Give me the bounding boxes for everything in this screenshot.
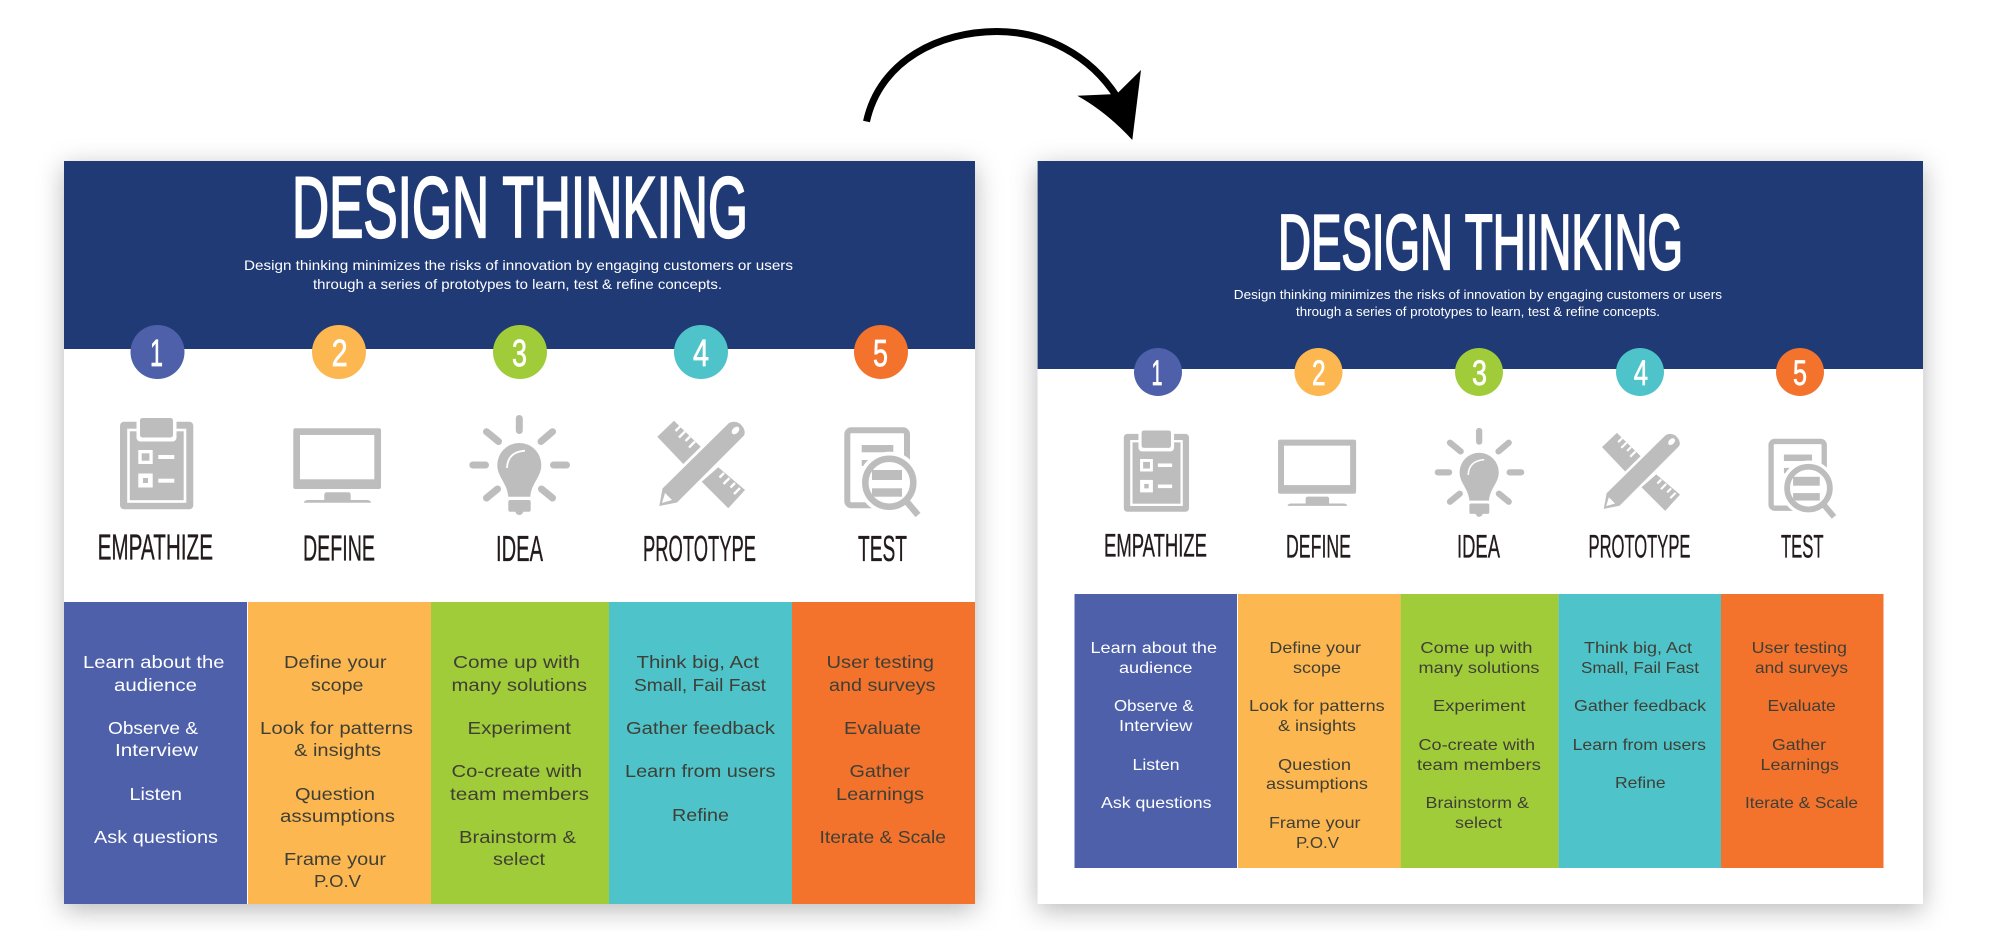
step number 1: 1 <box>150 333 163 375</box>
column: empathize: Ask questions <box>94 827 218 847</box>
column: define: P.O.V <box>1296 835 1340 852</box>
column: test: and surveys <box>1755 660 1848 677</box>
title: DESIGN THINKING <box>1278 198 1683 286</box>
column: idea: Experiment <box>468 718 571 738</box>
column: test: Learnings <box>1760 757 1839 774</box>
column: idea: Co-create with <box>1418 737 1535 754</box>
column: test: Evaluate <box>844 718 921 738</box>
column: prototype: Small, Fail Fast <box>634 675 766 695</box>
column: empathize: Listen <box>1132 757 1180 774</box>
column: empathize: Learn about the <box>1090 640 1217 657</box>
column: define: Frame your <box>1269 815 1360 832</box>
column: idea: team members <box>450 784 589 804</box>
column: define: & insights <box>1278 718 1356 735</box>
column: idea <box>1401 594 1559 868</box>
column: idea: select <box>493 849 545 869</box>
icon: pencil and ruler <box>657 421 745 508</box>
column: test: Learnings <box>836 784 924 804</box>
column: empathize: audience <box>1119 660 1192 677</box>
column: empathize: Interview <box>1119 718 1193 735</box>
column: prototype: Think big, Act <box>1584 640 1693 657</box>
step number 2: 2 <box>1312 354 1326 393</box>
column: empathize: Ask questions <box>1101 795 1212 812</box>
column: idea: Come up with <box>1420 640 1532 657</box>
column: empathize: Learn about the <box>83 652 224 672</box>
step number 2 <box>1294 348 1342 396</box>
column: idea: Brainstorm & <box>1426 795 1530 812</box>
column: define: P.O.V <box>314 871 361 891</box>
column: prototype <box>609 602 792 904</box>
arrow: from left panel to right panel <box>866 32 1141 140</box>
column: define: scope <box>311 675 364 695</box>
column: define: scope <box>1293 660 1341 677</box>
column: define: Define your <box>284 652 387 672</box>
step number 3 <box>493 325 547 379</box>
column: prototype <box>1559 594 1721 868</box>
subtitle: through a series of prototypes to learn, test & refine concepts. <box>1296 305 1660 319</box>
label: test: TEST <box>1781 528 1824 564</box>
label: empathize: EMPATHIZE <box>98 526 213 568</box>
icon: document with magnifier <box>847 430 920 515</box>
step number 5: 5 <box>873 333 888 375</box>
column: empathize: Observe & <box>1114 698 1194 715</box>
column: prototype: Refine <box>1615 775 1666 792</box>
column: idea: many solutions <box>452 675 587 695</box>
column: test: and surveys <box>829 675 936 695</box>
step number 3: 3 <box>512 333 527 375</box>
column: empathize: Listen <box>130 784 182 804</box>
step number 1: 1 <box>1152 354 1162 393</box>
step number 3: 3 <box>1472 354 1487 393</box>
column: idea <box>431 602 609 904</box>
label: define: DEFINE <box>1286 528 1351 564</box>
column: empathize: Observe & <box>108 718 198 738</box>
panel: left design thinking card <box>64 160 975 904</box>
icon: monitor <box>293 428 381 503</box>
icon: document with magnifier <box>1771 441 1836 517</box>
column: test <box>792 602 975 904</box>
subtitle <box>1234 288 1722 319</box>
step number 2: 2 <box>332 333 348 375</box>
column: idea: team members <box>1417 757 1541 774</box>
column: define: Look for patterns <box>1249 698 1385 715</box>
column: test: User testing <box>826 652 934 672</box>
column: define: Question <box>1278 757 1351 774</box>
panel: right design thinking card <box>1038 161 1923 904</box>
column: idea: Experiment <box>1433 698 1526 715</box>
column: define: Define your <box>1269 640 1361 657</box>
column: idea: many solutions <box>1418 660 1540 677</box>
column: test: Iterate & Scale <box>820 827 946 847</box>
column: define: Question <box>295 784 375 804</box>
column: idea: Come up with <box>453 652 580 672</box>
step number 1 <box>130 325 184 379</box>
step number 4: 4 <box>1634 354 1648 393</box>
column: empathize: audience <box>114 675 197 695</box>
column: define: & insights <box>294 740 381 760</box>
step number 1 <box>1134 348 1182 396</box>
step number 5: 5 <box>1793 354 1807 393</box>
column: test: Gather <box>850 761 910 781</box>
column: prototype: Learn from users <box>625 761 776 781</box>
label: test: TEST <box>858 528 907 569</box>
column: define <box>248 602 431 904</box>
label: idea: IDEA <box>496 528 543 569</box>
icon: monitor <box>1278 440 1356 506</box>
column: test: Iterate & Scale <box>1745 795 1858 812</box>
icon: clipboard <box>120 416 193 509</box>
step number 4 <box>1616 348 1664 396</box>
column: test: Evaluate <box>1768 698 1836 715</box>
column: prototype: Think big, Act <box>636 652 759 672</box>
subtitle <box>244 257 793 292</box>
column: define: assumptions <box>280 806 395 826</box>
column: prototype: Learn from users <box>1573 737 1706 754</box>
icon: clipboard <box>1124 429 1189 512</box>
step number 4 <box>674 325 728 379</box>
subtitle: Design thinking minimizes the risks of innovation by engaging customers or users <box>1234 288 1722 302</box>
column: define: assumptions <box>1266 776 1368 793</box>
title: DESIGN THINKING <box>292 160 748 256</box>
column: test: Gather <box>1772 737 1826 754</box>
column: idea: Co-create with <box>452 761 582 781</box>
column: define: Frame your <box>284 849 386 869</box>
column: prototype: Small, Fail Fast <box>1581 660 1700 677</box>
column: prototype: Gather feedback <box>626 718 775 738</box>
column: prototype: Gather feedback <box>1574 698 1706 715</box>
icon: light bulb <box>1438 431 1521 517</box>
column: define: Look for patterns <box>260 718 413 738</box>
column: test <box>1721 594 1884 868</box>
icon: pencil and ruler <box>1602 433 1680 511</box>
step number 5 <box>1776 348 1824 396</box>
step number 2 <box>312 325 366 379</box>
column: idea: Brainstorm & <box>459 827 576 847</box>
column: prototype: Refine <box>672 805 729 825</box>
label: define: DEFINE <box>303 528 375 568</box>
step number 3 <box>1455 348 1503 396</box>
step number 5 <box>854 325 908 379</box>
subtitle: through a series of prototypes to learn, test & refine concepts. <box>313 276 722 292</box>
column: empathize <box>64 602 247 904</box>
column: define <box>1238 594 1401 868</box>
subtitle: Design thinking minimizes the risks of innovation by engaging customers or users <box>244 257 793 273</box>
column: empathize: Interview <box>115 740 198 760</box>
label: prototype: PROTOTYPE <box>643 528 756 569</box>
column: empathize <box>1074 594 1237 868</box>
column: test: User testing <box>1752 640 1847 657</box>
label: empathize: EMPATHIZE <box>1104 528 1207 564</box>
label: idea: IDEA <box>1457 528 1500 564</box>
column: idea: select <box>1455 815 1503 832</box>
icon: light bulb <box>473 418 566 515</box>
label: prototype: PROTOTYPE <box>1588 528 1690 564</box>
step number 4: 4 <box>693 333 709 375</box>
